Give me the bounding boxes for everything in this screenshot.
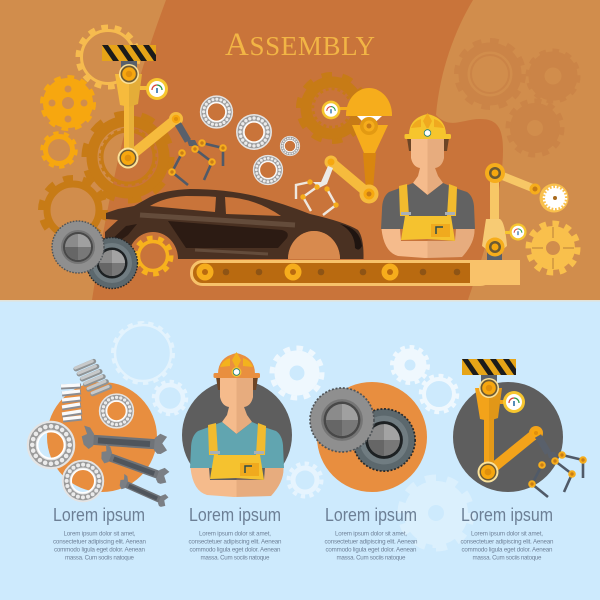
gear: centre brown with gauge	[298, 74, 366, 142]
orange disc	[317, 382, 427, 492]
dark disc	[453, 382, 563, 492]
text block: column 3: Lorem ipsum	[325, 505, 417, 525]
text block: column 1: Lorem ipsum dolor sit amet,	[64, 530, 136, 538]
upright spring	[61, 385, 82, 420]
text block: column 3: commodo ligula eget dolor. Aenean	[326, 546, 417, 554]
dark disc	[182, 380, 292, 490]
gear: outline upper	[78, 27, 138, 87]
text block: column 2: consectetuer adipiscing elit. Aenean	[188, 538, 282, 546]
background: right lighter shape	[436, 0, 600, 300]
panel: tires	[310, 382, 427, 492]
robot arm: upper left	[102, 45, 183, 168]
text block: column 1: consectetuer adipiscing elit. Aenean	[53, 538, 147, 546]
background: top band	[0, 0, 600, 300]
tire: front	[52, 221, 104, 273]
text block: column 2: commodo ligula eget dolor. Aenean	[190, 546, 281, 554]
text block: column 2: Lorem ipsum	[189, 505, 281, 525]
text block: column 1	[53, 505, 147, 562]
gauge: right	[509, 223, 527, 241]
claw: upper left	[168, 124, 227, 185]
saw blade	[540, 184, 568, 212]
text block: column 4: massa. Cum sociis natoque	[472, 554, 542, 562]
text block: column 3: Lorem ipsum dolor sit amet,	[335, 530, 407, 538]
text block: column 4: commodo ligula eget dolor. Aenean	[462, 546, 553, 554]
tire: rear	[353, 409, 415, 471]
tilted spring	[75, 358, 110, 397]
faded gears: upper right	[456, 40, 578, 154]
background: bottom band	[0, 300, 600, 600]
bearings	[32, 397, 130, 497]
tire: rear	[86, 238, 138, 288]
gear: by front wheel	[135, 238, 171, 274]
text block: column 4: consectetuer adipiscing elit. Aenean	[460, 538, 554, 546]
tire: front	[310, 388, 374, 452]
worker: top	[381, 113, 475, 258]
faded gears: bottom band	[113, 323, 471, 548]
text block: column 4	[460, 505, 554, 562]
background: left lighter wedge	[0, 0, 166, 300]
robot arm	[462, 359, 587, 497]
wrench: medium	[98, 444, 172, 486]
text block: column 4: Lorem ipsum dolor sit amet,	[471, 530, 543, 538]
gear: right yellow	[528, 224, 578, 272]
gear: large brown	[84, 114, 172, 200]
gauge: centre	[322, 101, 340, 119]
gauge: upper left	[146, 78, 168, 100]
worker: bottom	[190, 352, 284, 497]
title: ASSEMBLY	[225, 27, 375, 63]
panel: robot arm	[453, 359, 587, 497]
text block: column 4: Lorem ipsum	[461, 505, 553, 525]
gear: small ring	[42, 133, 76, 167]
text block: column 3: massa. Cum sociis natoque	[336, 554, 406, 562]
conveyor belt	[192, 260, 520, 285]
text block: column 1: Lorem ipsum	[53, 505, 145, 525]
robot arm: right	[482, 163, 540, 260]
text block: column 2: massa. Cum sociis natoque	[200, 554, 270, 562]
text block: column 1: massa. Cum sociis natoque	[65, 554, 135, 562]
text block: column 2: Lorem ipsum dolor sit amet,	[199, 530, 271, 538]
bearings	[204, 99, 298, 182]
text block: column 2	[188, 505, 282, 562]
wrench: large	[81, 426, 168, 454]
panel: spare parts	[32, 358, 172, 508]
robot arm: centre top	[324, 88, 392, 204]
text block: column 1: commodo ligula eget dolor. Aenean	[54, 546, 146, 554]
orange disc	[47, 382, 157, 492]
text block: column 3	[324, 505, 418, 562]
gear: solid orange	[42, 78, 94, 128]
claw: white gripper	[296, 166, 339, 215]
text block: column 3: consectetuer adipiscing elit. Aenean	[324, 538, 418, 546]
panel: worker	[182, 352, 292, 497]
gear: lower brown ring	[41, 178, 105, 242]
wrench: small	[117, 473, 170, 508]
car	[105, 189, 364, 259]
